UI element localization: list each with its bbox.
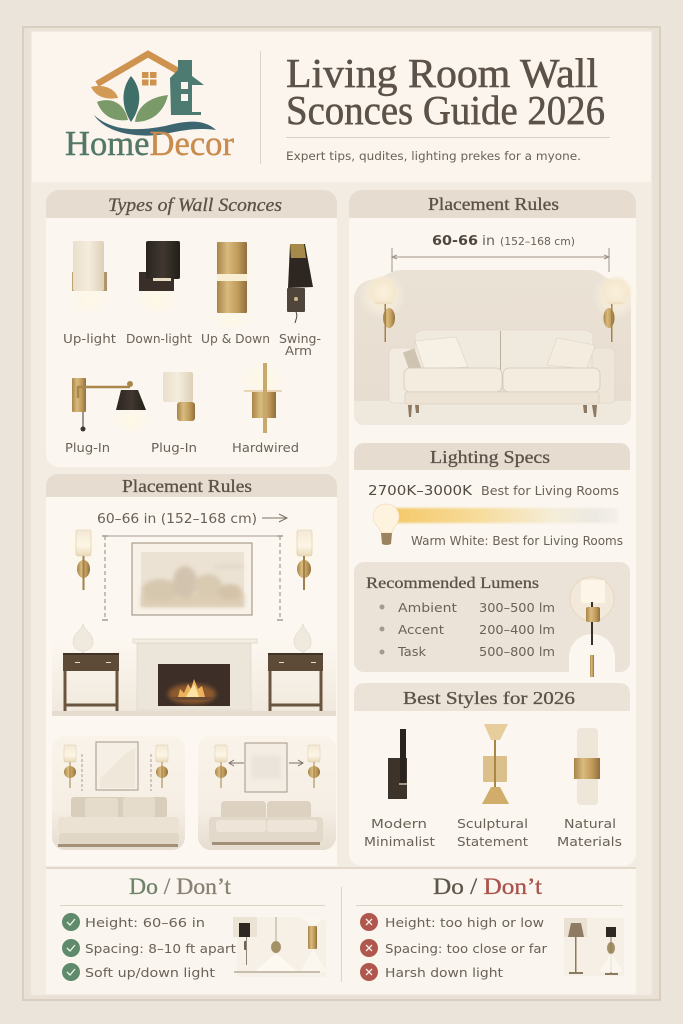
measurement label right	[432, 233, 575, 249]
lumens row: task: 500–800 lm	[479, 645, 555, 659]
lumens row: accent: 200–400 lm	[479, 623, 555, 637]
label: modern minimalist: Modern	[371, 816, 427, 831]
do item: light: Soft up/down light	[85, 965, 215, 980]
label: swing-arm	[279, 332, 321, 358]
lumens sconce	[569, 577, 615, 677]
don't item: height: Height: too high or low	[385, 915, 544, 930]
icon: plug-in arm sconce	[72, 378, 151, 433]
spacing arrows	[229, 760, 303, 766]
measurement label: 60–66 in (152–168 cm)	[97, 512, 257, 527]
logo leaves	[91, 76, 168, 122]
console table right	[268, 653, 323, 711]
logo	[65, 54, 234, 163]
don't illustration	[564, 918, 624, 976]
icon: up-light sconce	[69, 241, 109, 316]
recommended lumens box	[354, 562, 630, 677]
do item: spacing	[62, 939, 236, 957]
lumens row: ambient: 300–500 lm	[479, 601, 555, 615]
best for label: Best for Living Rooms	[481, 484, 619, 498]
title	[286, 50, 605, 133]
fireplace	[133, 639, 257, 710]
do illustration	[233, 917, 327, 977]
title: Living Room Wall	[286, 50, 598, 96]
label: sculptural statement: Statement	[457, 834, 528, 849]
types heading: Types of Wall Sconces	[108, 195, 282, 216]
label: up and down: Up & Down	[201, 332, 270, 346]
don't item: height	[360, 913, 544, 931]
do heading: Do / Don’t	[129, 874, 232, 899]
wall shading	[52, 640, 336, 712]
logo wave	[94, 115, 216, 136]
label: up-light: Up-light	[63, 332, 116, 346]
label: down-light: Down-light	[126, 332, 192, 346]
measurement label right: (152–168 cm)	[500, 235, 575, 248]
floor	[52, 711, 336, 716]
lumens row: task	[380, 644, 555, 659]
label: sculptural statement: Sculptural	[457, 816, 528, 831]
placement heading right: Placement Rules	[428, 194, 559, 214]
icon: plug-in shade sconce	[163, 372, 195, 421]
icon: modern minimalist sconce	[388, 729, 407, 799]
column divider	[341, 887, 342, 982]
room sconce left	[358, 272, 406, 342]
subtitle: Expert tips, qudites, lighting prekes for a myone.	[286, 149, 581, 163]
do item: height	[62, 913, 205, 931]
vignette sconce right	[156, 745, 168, 788]
measurement label right: 60-66	[432, 233, 478, 249]
do item: spacing: Spacing: 8–10 ft apart	[85, 941, 236, 956]
vignette sconce left two	[215, 745, 227, 788]
vignette sofa	[58, 797, 179, 847]
label: swing-arm: Swing-	[279, 332, 321, 346]
don't item: light: Harsh down light	[385, 965, 503, 980]
lumens heading: Recommended Lumens	[366, 575, 539, 592]
icon: down-light sconce	[137, 241, 180, 316]
color temperature label: 2700K–3000K	[368, 484, 473, 499]
measurement label right: in	[482, 234, 495, 249]
icon: swing-arm sconce	[287, 244, 313, 323]
lighting specs heading bar	[354, 443, 630, 470]
do item: height: Height: 60–66 in	[85, 915, 205, 930]
icon: natural materials sconce	[574, 728, 600, 805]
do rule	[60, 905, 325, 906]
don't item: light	[360, 963, 503, 981]
label: plug-in: Plug-In	[65, 441, 110, 455]
header divider	[260, 51, 261, 164]
vignette art	[96, 742, 138, 790]
best styles heading: Best Styles for 2026	[403, 688, 575, 708]
vignette guides	[82, 754, 151, 791]
label: plug-in second: Plug-In	[151, 441, 197, 455]
vase right	[294, 624, 311, 654]
label: sculptural statement	[457, 816, 528, 849]
don't item: spacing: Spacing: too close or far	[385, 941, 548, 956]
placement heading bar right	[349, 190, 636, 218]
panel: do and don't	[46, 867, 636, 994]
vignette: sofa with art, spacing	[198, 736, 336, 850]
icon: hardwired sconce	[240, 360, 284, 433]
label: swing-arm: Arm	[285, 344, 312, 358]
label: hardwired: Hardwired	[232, 441, 299, 455]
don't item: spacing	[360, 939, 548, 957]
panel: types of wall sconces	[46, 190, 337, 467]
lumens row: accent	[380, 622, 555, 637]
sconce left	[65, 523, 101, 590]
room scene	[354, 270, 640, 425]
lumens row: ambient	[380, 600, 555, 615]
icon: bulb	[373, 504, 399, 545]
icon: sculptural statement sconce	[482, 724, 509, 804]
label: natural materials	[557, 816, 622, 849]
logo house windows	[181, 82, 188, 101]
label: natural materials: Materials	[557, 834, 622, 849]
logo window	[142, 72, 156, 86]
height guides	[102, 536, 283, 620]
placement heading bar	[46, 474, 337, 497]
logo roof	[97, 54, 178, 84]
types heading bar	[46, 190, 337, 218]
warm white label: Warm White: Best for Living Rooms	[411, 534, 623, 548]
title: Sconces Guide 2026	[286, 87, 605, 133]
lumens row: ambient: Ambient	[398, 600, 457, 615]
console table left	[63, 653, 119, 711]
logo wordmark: HomeDecor	[65, 124, 234, 163]
logo house	[170, 60, 204, 115]
vignette sofa two	[209, 801, 323, 845]
vignette art two	[245, 743, 287, 792]
room sofa	[389, 330, 615, 417]
best styles heading bar	[354, 683, 630, 711]
header panel	[32, 32, 651, 182]
panel: placement rules right	[349, 190, 640, 866]
do item: light	[62, 963, 215, 981]
arrow right	[262, 514, 287, 522]
framed painting	[132, 543, 252, 615]
don't heading: Do / Don’t	[433, 874, 543, 899]
floor strip	[354, 401, 631, 425]
sconce right	[286, 523, 322, 590]
label: natural materials: Natural	[564, 816, 616, 831]
lumens row: accent: Accent	[398, 622, 444, 637]
room sconce right	[592, 272, 640, 342]
temperature bar	[388, 508, 618, 523]
label: modern minimalist	[364, 816, 435, 849]
vignette sconce left	[64, 745, 76, 788]
panel: placement rules left	[46, 474, 337, 866]
lighting specs heading: Lighting Specs	[430, 447, 550, 467]
icon: up and down sconce	[212, 242, 252, 330]
title rule	[286, 137, 610, 138]
vase left	[73, 624, 93, 654]
don't rule	[356, 905, 623, 906]
lumens row: task: Task	[397, 644, 427, 659]
label: modern minimalist: Minimalist	[364, 834, 435, 849]
dimension line	[392, 248, 609, 272]
vignette: sofa with art, height	[52, 736, 185, 850]
placement heading: Placement Rules	[122, 476, 252, 496]
vignette sconce right two	[308, 745, 320, 788]
